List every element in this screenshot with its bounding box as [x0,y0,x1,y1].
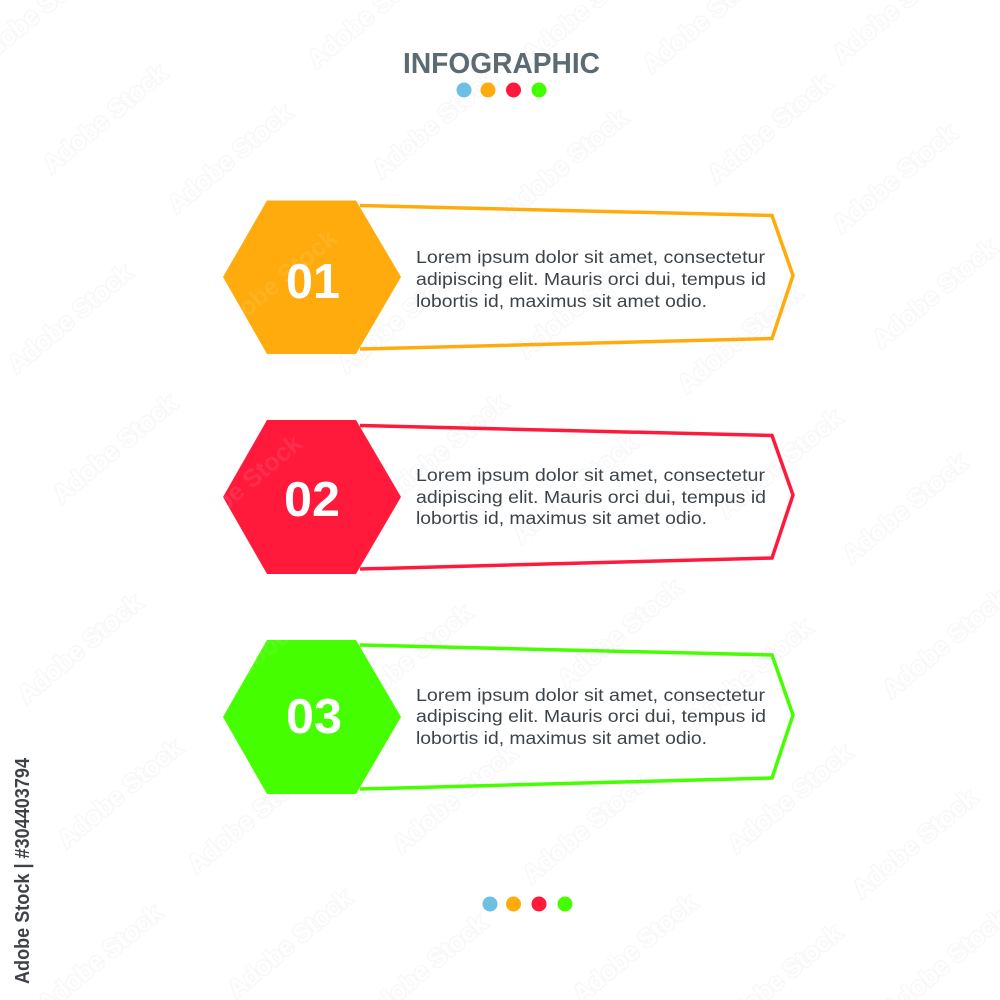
text block 02 [416,465,766,528]
number 02: 02 [284,473,340,527]
text block 03: adipiscing elit. Mauris orci dui, tempus id [416,706,766,726]
text: Adobe Stock [342,599,477,719]
text block 03: Lorem ipsum dolor sit amet, consectetur [416,685,765,705]
text block 01: Lorem ipsum dolor sit amet, consectetur [416,247,765,267]
text: Adobe Stock [377,389,512,509]
text block 03 [416,685,766,748]
text: Adobe Stock [552,574,687,694]
text: Adobe Stock [207,224,342,344]
text: Adobe Stock [867,234,1000,354]
text: Adobe Stock [702,69,837,189]
hexagon 02 [223,420,401,574]
text: Adobe Stock [162,99,297,219]
text: Adobe Stock [2,259,137,379]
text: Adobe Stock [332,259,467,379]
text: Adobe Stock [52,734,187,854]
text block 03: lobortis id, maximus sit amet odio. [416,728,707,748]
text: Adobe Stock [722,739,857,859]
text: Adobe Stock [37,59,172,179]
text block 02: lobortis id, maximus sit amet odio. [416,508,707,528]
hexagon 01 [223,200,401,354]
hexagon 03 [223,640,401,794]
text: Adobe Stock [512,244,647,364]
title: INFOGRAPHIC [403,48,600,80]
text: Adobe Stock [497,104,632,224]
text: Adobe Stock [182,759,317,879]
text: Adobe Stock [712,404,847,524]
text: Adobe Stock [517,769,652,889]
text: Adobe Stock [837,449,972,569]
panel: step 02 [223,420,793,574]
outline arrow box 03 [360,645,793,789]
text: Adobe Stock [172,429,307,549]
text: Adobe Stock [682,614,817,734]
text: Adobe Stock [827,119,962,239]
text block 01: adipiscing elit. Mauris orci dui, tempus id [416,269,766,289]
stock credit: Adobe Stock | #304403794 [12,757,34,984]
text: Adobe Stock [217,574,352,694]
text block 01: lobortis id, maximus sit amet odio. [416,291,707,311]
number 03: 03 [286,690,342,744]
panel: step 01 [223,200,793,354]
panel: step 03 [223,640,793,794]
outline arrow box 02 [360,426,793,569]
text block 02: adipiscing elit. Mauris orci dui, tempus id [416,487,766,507]
bottom dots [482,896,572,912]
outline arrow box 01 [360,206,793,349]
text: Adobe Stock [47,389,182,509]
text: Adobe Stock [387,739,522,859]
text: Adobe Stock [847,784,982,904]
text: Adobe Stock [367,64,502,184]
text block 01 [416,247,766,311]
text: Adobe Stock [507,429,642,549]
text: Adobe Stock [12,589,147,709]
top dots [456,82,546,98]
text: Adobe Stock [672,279,807,399]
text block 02: Lorem ipsum dolor sit amet, consectetur [416,465,765,485]
number 01: 01 [286,255,340,309]
